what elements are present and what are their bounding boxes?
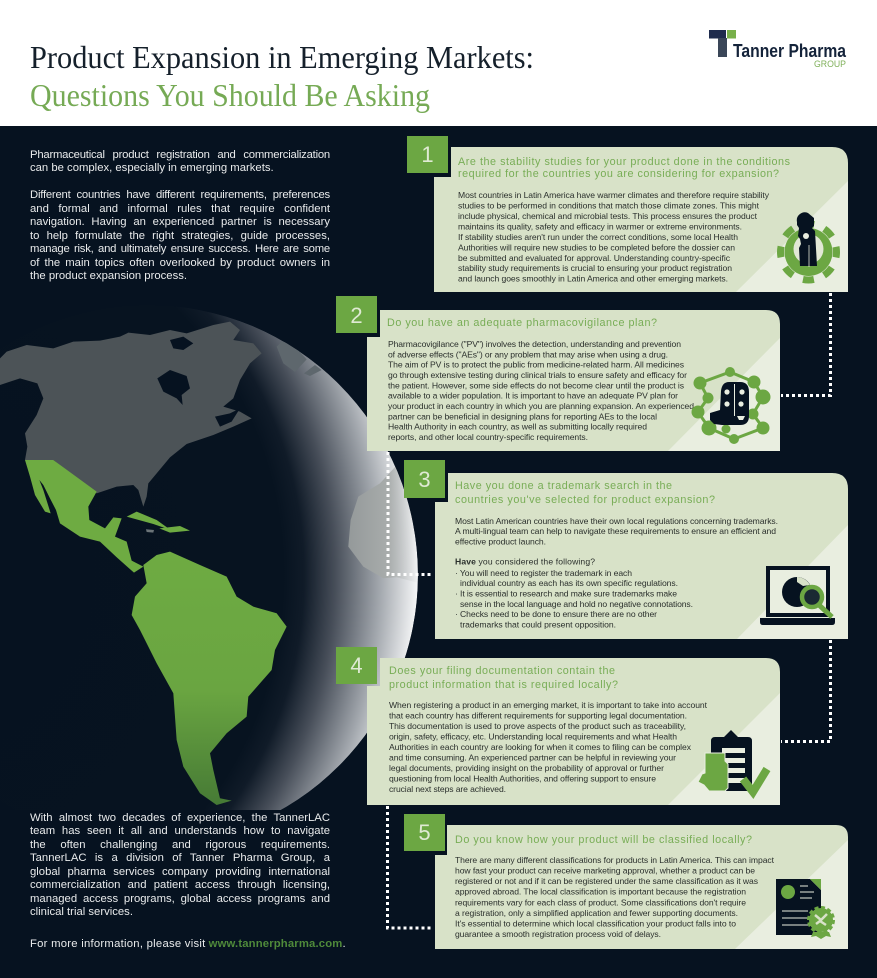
number 2 xyxy=(336,296,377,333)
body 1: studies to be performed in conditions that match those climate zones. This might xyxy=(458,200,760,210)
body 3: Most Latin American countries have their own local regulations concerning trademarks. xyxy=(455,516,778,526)
body 1 xyxy=(458,190,770,284)
map: north america xyxy=(0,322,262,507)
number 4: 4 xyxy=(350,653,363,678)
body 4: When registering a product in an emerging market, it is important to take into account xyxy=(389,700,708,710)
body 2: Pharmacovigilance ("PV") involves the detection, understanding and prevention xyxy=(388,339,681,349)
body 1: be submitted and evaluated for approval. Understanding country-specific xyxy=(458,253,731,263)
icon: brain and molecule network xyxy=(692,367,770,444)
question 4 xyxy=(389,665,618,691)
panel 1: stability studies xyxy=(407,136,848,292)
logo: Tanner Pharma Group: Tanner Pharma xyxy=(733,41,847,61)
body 5 xyxy=(455,855,775,939)
company description text: global pharma services company providing international xyxy=(30,866,330,878)
intro text: manage risk, and ultimately ensure success. Here are some xyxy=(30,243,330,255)
intro text: the product expansion process. xyxy=(30,270,187,282)
body 5: how fast your product can receive marketing approval, whether a product can be xyxy=(455,866,755,876)
body 1: and launch goes smoothly in Latin America and other emerging markets. xyxy=(458,274,728,284)
number 2: 2 xyxy=(350,303,363,328)
body 4: and time consuming. An experienced partner can be helpful in reviewing your xyxy=(389,752,676,762)
company description text: TannerLAC is a division of Tanner Pharma Group, a xyxy=(30,852,330,864)
question 3 xyxy=(455,480,715,506)
intro text: and formal and informal rules that require confident xyxy=(30,202,330,214)
body 4: Authorities in each country are looking for when it comes to filing can be complex xyxy=(389,742,692,752)
number 5 xyxy=(404,814,445,851)
body 1: maintains its quality, safety and efficacy in warmer or extreme environments. xyxy=(458,221,742,231)
question 3: countries you've selected for product expansion? xyxy=(455,494,715,506)
body 3 xyxy=(455,516,778,630)
body 5: requirements vary for each class of product. Some classifications don't require xyxy=(455,897,746,907)
body 2: reports, and other local country-specific requirements. xyxy=(388,432,588,442)
title: Questions You Should Be Asking xyxy=(30,77,430,113)
body 5: It's essential to determine which local classification your product falls into to xyxy=(455,918,736,928)
intro text: navigation. Having an experienced partner is necessary xyxy=(30,216,330,228)
intro text: Pharmaceutical product registration and commercialization xyxy=(30,148,330,160)
icon: document with seal xyxy=(776,879,834,939)
company description text: clinical trial services. xyxy=(30,906,133,918)
question 2: Do you have an adequate pharmacovigilance plan? xyxy=(387,317,657,329)
logo: Tanner Pharma Group xyxy=(709,30,847,70)
body 4: This documentation is used to prove aspects of the product such as traceability, xyxy=(389,721,686,731)
question 3: Have you done a trademark search in the xyxy=(455,480,672,492)
company description text: team has seen it all and understands how to navigate xyxy=(30,825,330,837)
map: mexico and central america xyxy=(25,460,143,573)
panel 5: local classification xyxy=(404,814,848,949)
question 5: Do you know how your product will be classified locally? xyxy=(455,834,752,846)
body 1: stability study requirements is crucial to ensuring your product registration xyxy=(458,263,732,273)
body 4: questioning from local Health Authorities, and offering support to ensure xyxy=(389,774,656,784)
map: south america xyxy=(132,552,287,805)
body 5: guarantee a smooth registration process void of delays. xyxy=(455,929,661,939)
body 2: available to a wider population. It is important to have an adequate PV plan for xyxy=(388,391,678,401)
question 1: required for the countries you are considering for expansion? xyxy=(458,168,779,180)
body 2: the patient. However, some side effects do not become clear until the product is xyxy=(388,380,684,390)
number 3 xyxy=(404,460,445,498)
body 3: sense in the local language and hold no negative connotations. xyxy=(460,599,693,609)
body 3: · It is essential to research and make sure trademarks make xyxy=(455,588,677,598)
body 1: include physical, chemical and microbial tests. This process ensures the product xyxy=(458,211,758,221)
body 4: legal documents, providing insight on the probability of approval or further xyxy=(389,763,664,773)
body 4 xyxy=(389,700,708,794)
map: caribbean islands xyxy=(127,512,190,533)
question 4: product information that is required locally? xyxy=(389,679,618,691)
body 5: registered or not and if it can be registered under the same classification as it was xyxy=(455,876,758,886)
body 3: Have you considered the following? xyxy=(455,556,595,566)
body 3: effective product launch. xyxy=(455,536,546,546)
intro text: Different countries have different requirements, preferences xyxy=(30,189,330,201)
body 5: There are many different classifications for products in Latin America. This can impact xyxy=(455,855,775,865)
body 3: A multi-lingual team can help to navigate these requirements to ensure an efficient and xyxy=(455,526,776,536)
company description text: commercialization and patient access through licensing, xyxy=(30,879,330,891)
number 3: 3 xyxy=(418,467,431,492)
website call to action: For more information, please visit www.tannerpharma.com. xyxy=(30,938,346,950)
question 1 xyxy=(458,156,791,180)
body 2: The aim of PV is to protect the public from medicine-related harm. All medicines xyxy=(388,360,684,370)
panel 4: filing documentation xyxy=(336,647,780,805)
body 3: · Checks need to be done to ensure there are no other xyxy=(455,609,657,619)
number 1 xyxy=(407,136,448,173)
company description text: the often challenging and rigorous requirements. xyxy=(30,838,330,850)
body 2: your product in each country in which you are planning expansion. An experienced xyxy=(388,401,694,411)
body 1: Authorities will require new studies to be completed before the dossier can xyxy=(458,242,735,252)
body 1: If stability studies aren't run under the correct conditions, some local Health xyxy=(458,232,738,242)
body 4: crucial next steps are achieved. xyxy=(389,784,506,794)
icon: clipboard, bottle and check mark xyxy=(698,730,767,792)
body 2: Health Authority in each country, as well as submitting locally required xyxy=(388,422,647,432)
title: Product Expansion in Emerging Markets: xyxy=(30,39,534,75)
globe illustration xyxy=(0,310,418,810)
question 1: Are the stability studies for your product done in the conditions xyxy=(458,156,791,168)
body 1: Most countries in Latin America have warmer climates and therefore require stability xyxy=(458,190,770,200)
title xyxy=(30,39,534,113)
logo: Tanner Pharma Group: GROUP xyxy=(814,59,846,70)
panel 2: pharmacovigilance xyxy=(336,296,780,451)
body 4: origin, safety, efficacy, etc. Understanding local requirements and what Health xyxy=(389,732,677,742)
body 2: go through extensive testing during clinical trials to ensure safety and efficacy for xyxy=(388,370,687,380)
body 5: approved abroad. The local classification is important because the registration xyxy=(455,887,746,897)
dotted connector lines xyxy=(388,293,830,928)
body 2: partner can be beneficial in designing plans for reporting AEs to the local xyxy=(388,411,657,421)
body 2: of adverse effects ("AEs") or any problem that may arise when using a drug. xyxy=(388,349,668,359)
company description text xyxy=(30,812,330,918)
intro text: of the main topics often overlooked by product owners in xyxy=(30,256,330,268)
number 4 xyxy=(336,647,377,684)
map: greenland fragments xyxy=(277,342,322,376)
icon: gear and microscope xyxy=(780,212,836,280)
company description text: managed access programs, global access programs and xyxy=(30,892,330,904)
intro text xyxy=(30,148,330,282)
icon: laptop with globe and magnifier xyxy=(760,568,835,625)
body 3: · You will need to register the trademark in each xyxy=(455,568,632,578)
body 3: trademarks that could present opposition. xyxy=(460,620,616,630)
body 2 xyxy=(388,339,694,442)
number 1: 1 xyxy=(421,142,434,167)
intro text: to help formulate the right strategies, guide processes, xyxy=(30,230,330,242)
question 4: Does your filing documentation contain the xyxy=(389,665,615,677)
body 5: a registration, only a simplified application and fewer supporting documents. xyxy=(455,908,738,918)
company description text: With almost two decades of experience, the TannerLAC xyxy=(30,812,330,824)
map: africa xyxy=(348,466,416,581)
panel 3: trademark search xyxy=(404,460,848,639)
number 5: 5 xyxy=(418,820,431,845)
body 4: that each country has different requirements for supporting legal documentation. xyxy=(389,710,687,720)
body 3: individual country as each has its own specific regulations. xyxy=(460,578,678,588)
intro text: can be complex, especially in emerging markets. xyxy=(30,162,274,174)
